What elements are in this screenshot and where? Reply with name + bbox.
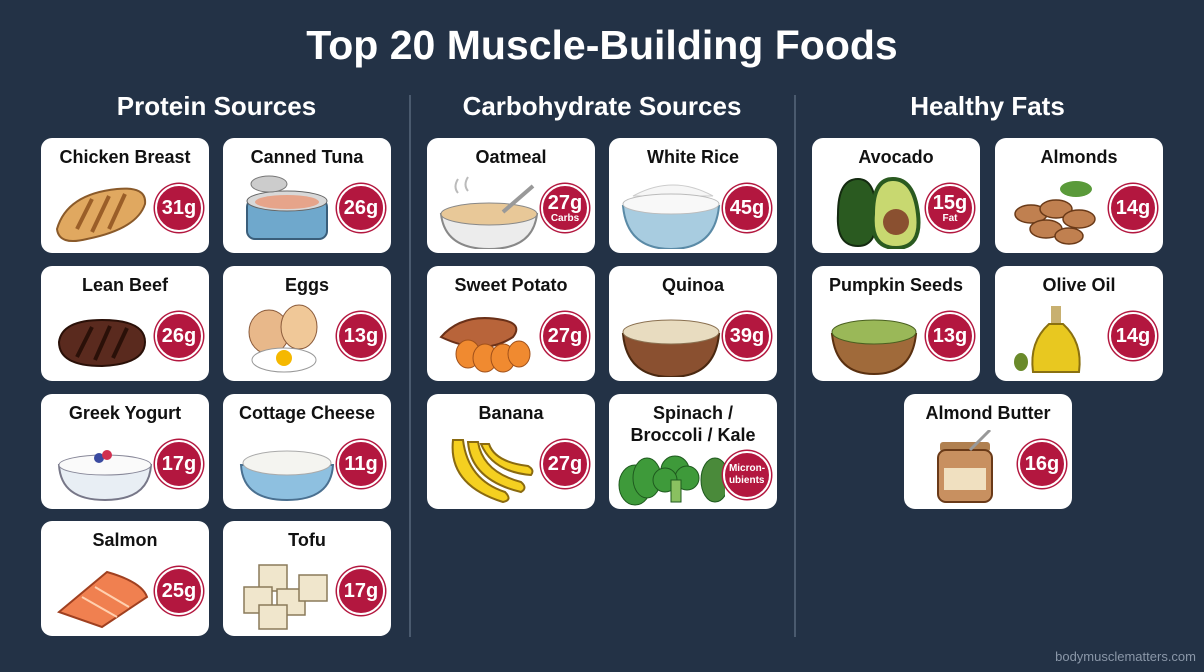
card: banana: 27g <box>548 453 582 475</box>
card: chicken breast: 31g <box>162 197 196 219</box>
card: quinoa: 39g <box>730 325 764 347</box>
card: tofu: 17g <box>344 580 378 602</box>
card: spinach broccoli kale <box>609 394 777 509</box>
card: oatmeal: Oatmeal <box>475 147 547 167</box>
card: salmon: Salmon <box>92 530 158 550</box>
card: spinach broccoli kale: ubients <box>729 475 764 486</box>
card: pumpkin seeds <box>812 266 980 381</box>
card: greek yogurt <box>41 394 209 509</box>
card: tofu <box>223 521 391 636</box>
card: oatmeal: 27g <box>548 192 582 214</box>
card: banana <box>427 394 595 509</box>
card: olive oil: 14g <box>1116 325 1150 347</box>
card: eggs: Eggs <box>285 275 329 295</box>
card: spinach broccoli kale: Spinach / <box>653 403 733 423</box>
heading: carbohydrates: Carbohydrate Sources <box>463 91 741 121</box>
card: olive oil <box>995 266 1163 381</box>
card: lean beef: Lean Beef <box>82 275 168 295</box>
card: cottage cheese <box>223 394 391 509</box>
card: almond butter: 16g <box>1025 453 1059 475</box>
card: pumpkin seeds: 13g <box>933 325 967 347</box>
card: almonds <box>995 138 1163 253</box>
card: canned tuna <box>223 138 391 253</box>
card: almond butter <box>904 394 1072 509</box>
card: lean beef: 26g <box>162 325 196 347</box>
card: avocado: 15g <box>933 192 967 214</box>
card: quinoa: Quinoa <box>662 275 724 295</box>
card: greek yogurt: Greek Yogurt <box>69 403 181 423</box>
card: almond butter: Almond Butter <box>926 403 1050 423</box>
card: olive oil: Olive Oil <box>1042 275 1116 295</box>
card: white rice: 45g <box>730 197 764 219</box>
card: avocado: Fat <box>942 212 958 224</box>
card: oatmeal <box>427 138 595 253</box>
card: sweet potato: 27g <box>548 325 582 347</box>
heading: fats: Healthy Fats <box>910 91 1065 121</box>
card: sweet potato <box>427 266 595 381</box>
card: cottage cheese: 11g <box>344 453 378 475</box>
card: lean beef <box>41 266 209 381</box>
card: oatmeal: Carbs <box>551 212 579 224</box>
title: Top 20 Muscle-Building Foods <box>306 22 898 68</box>
card: sweet potato: Sweet Potato <box>454 275 568 295</box>
card: white rice <box>609 138 777 253</box>
card: salmon <box>41 521 209 636</box>
card: almonds: Almonds <box>1040 147 1118 167</box>
card: avocado: Avocado <box>858 147 934 167</box>
card: canned tuna: Canned Tuna <box>251 147 363 167</box>
card: spinach broccoli kale: Broccoli / Kale <box>630 425 756 445</box>
card: eggs: 13g <box>344 325 378 347</box>
card: pumpkin seeds: Pumpkin Seeds <box>829 275 963 295</box>
card: greek yogurt: 17g <box>162 453 196 475</box>
card: white rice: White Rice <box>647 147 739 167</box>
card: salmon: 25g <box>162 580 196 602</box>
card: chicken breast <box>41 138 209 253</box>
card: almonds: 14g <box>1116 197 1150 219</box>
card: chicken breast: Chicken Breast <box>59 147 191 167</box>
card: tofu: Tofu <box>288 530 326 550</box>
card: quinoa <box>609 266 777 381</box>
card: banana: Banana <box>478 403 544 423</box>
card: spinach broccoli kale: Micron- <box>729 463 765 474</box>
card: cottage cheese: Cottage Cheese <box>239 403 375 423</box>
card: avocado <box>812 138 980 253</box>
watermark: bodymusclematters.com <box>1055 649 1196 664</box>
card: eggs <box>223 266 391 381</box>
heading: protein: Protein Sources <box>117 91 316 121</box>
card: canned tuna: 26g <box>344 197 378 219</box>
